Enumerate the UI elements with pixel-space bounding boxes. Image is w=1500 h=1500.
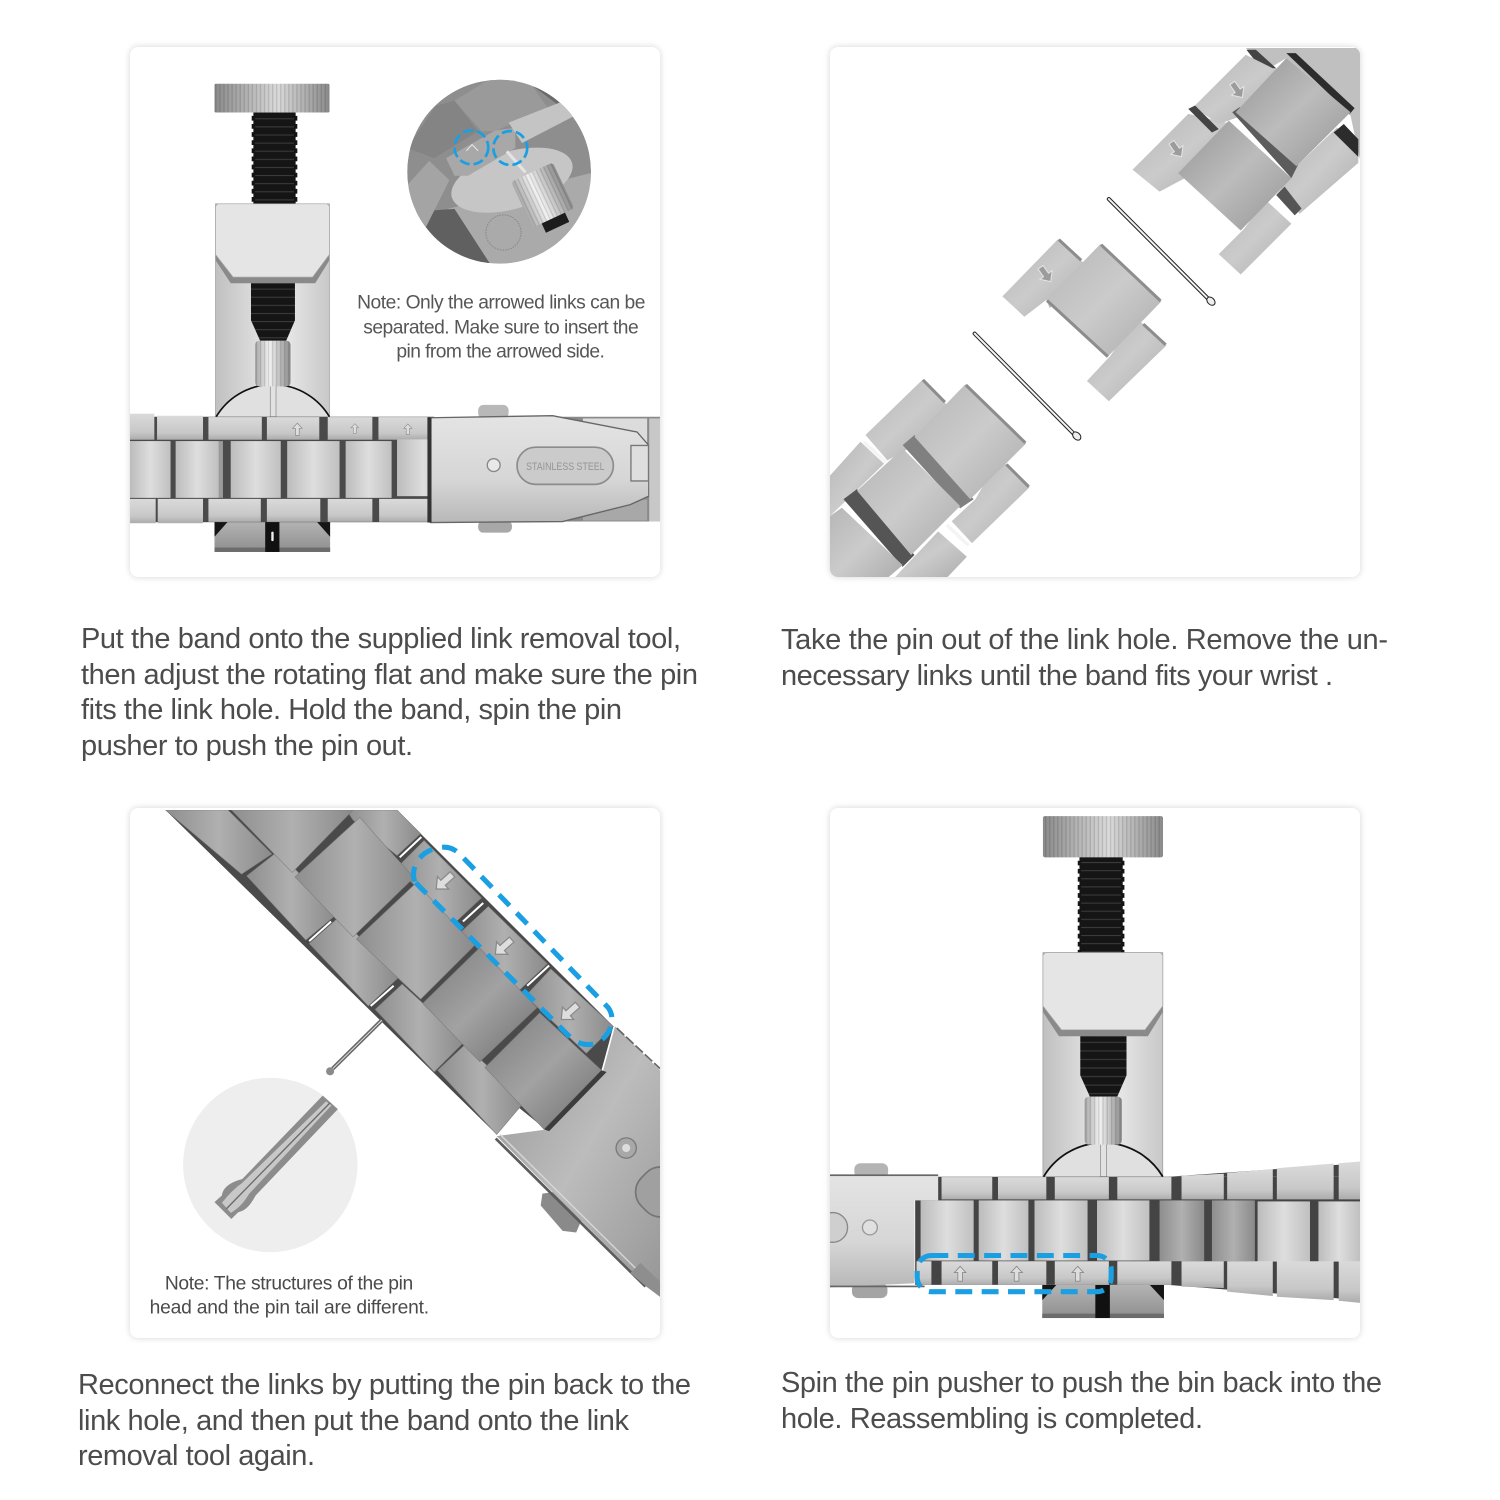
clasp: [496, 1026, 694, 1297]
protruding pin: [326, 1020, 382, 1075]
tool base: [215, 522, 330, 552]
watch band links: [915, 1162, 1360, 1303]
step 2 text: [781, 624, 1388, 692]
step 1 text: Put the band onto the supplied link removal tool,: [81, 623, 681, 655]
step 1 text: fits the link hole. Hold the band, spin the pin: [81, 694, 622, 726]
step 1 text: then adjust the rotating flat and make sure the pin: [81, 659, 698, 691]
separated link: [1002, 239, 1166, 401]
step 2 text: Take the pin out of the link hole. Remove the un-: [781, 624, 1388, 656]
tool base: [1042, 1285, 1164, 1318]
note text: Note: Only the arrowed links can be: [357, 293, 645, 314]
note text: pin from the arrowed side.: [396, 342, 605, 363]
panel: step 2 separated links: [830, 47, 1360, 577]
tool clamp body: [1043, 953, 1163, 1177]
step 1 text: [81, 623, 698, 762]
step 3 text: [78, 1369, 691, 1472]
step 4 text: hole. Reassembling is completed.: [781, 1403, 1203, 1435]
upper band segment: [1133, 48, 1360, 274]
tool knob: [1043, 816, 1163, 857]
blue dashed highlight: [413, 847, 612, 1045]
panel: step 3 reconnect links: [130, 808, 660, 1338]
tool clamp body: [216, 204, 329, 417]
watch band links: [130, 414, 449, 523]
step 1 text: pusher to push the pin out.: [81, 730, 413, 762]
step 2 text: necessary links until the band fits your wrist .: [781, 660, 1333, 692]
link arrows: [431, 868, 583, 1026]
pin one: [975, 334, 1082, 442]
link arrows: [954, 1266, 1084, 1281]
note text: Note: The structures of the pin: [165, 1273, 413, 1294]
inset photo: arrowed links close-up: [407, 79, 596, 266]
blue dashed highlight: [917, 1255, 1111, 1292]
tool upper screw: [1079, 857, 1123, 953]
watch band links: [165, 810, 613, 1134]
step 3 text: link hole, and then put the band onto the link: [78, 1405, 630, 1437]
link arrows: [293, 423, 412, 435]
clasp: [427, 405, 660, 533]
panel: step 4 push pin back: [830, 808, 1360, 1338]
panel: step 1 remove pin with tool: [130, 47, 660, 577]
note text: separated. Make sure to insert the: [363, 317, 639, 338]
note text: head and the pin tail are different.: [150, 1298, 429, 1319]
inset: pin head close-up: [183, 1078, 357, 1252]
pin two: [1109, 199, 1217, 307]
step 4 text: Spin the pin pusher to push the bin back into the: [781, 1367, 1382, 1399]
step 3 text: removal tool again.: [78, 1440, 315, 1472]
clasp: [818, 1163, 938, 1298]
clasp: STAINLESS STEEL: [526, 461, 605, 473]
tool upper screw: [253, 113, 296, 204]
tool knob: [215, 84, 329, 113]
lower band segment: [830, 379, 1029, 578]
step 3 text: Reconnect the links by putting the pin back to the: [78, 1369, 691, 1401]
step 4 text: [781, 1367, 1382, 1435]
